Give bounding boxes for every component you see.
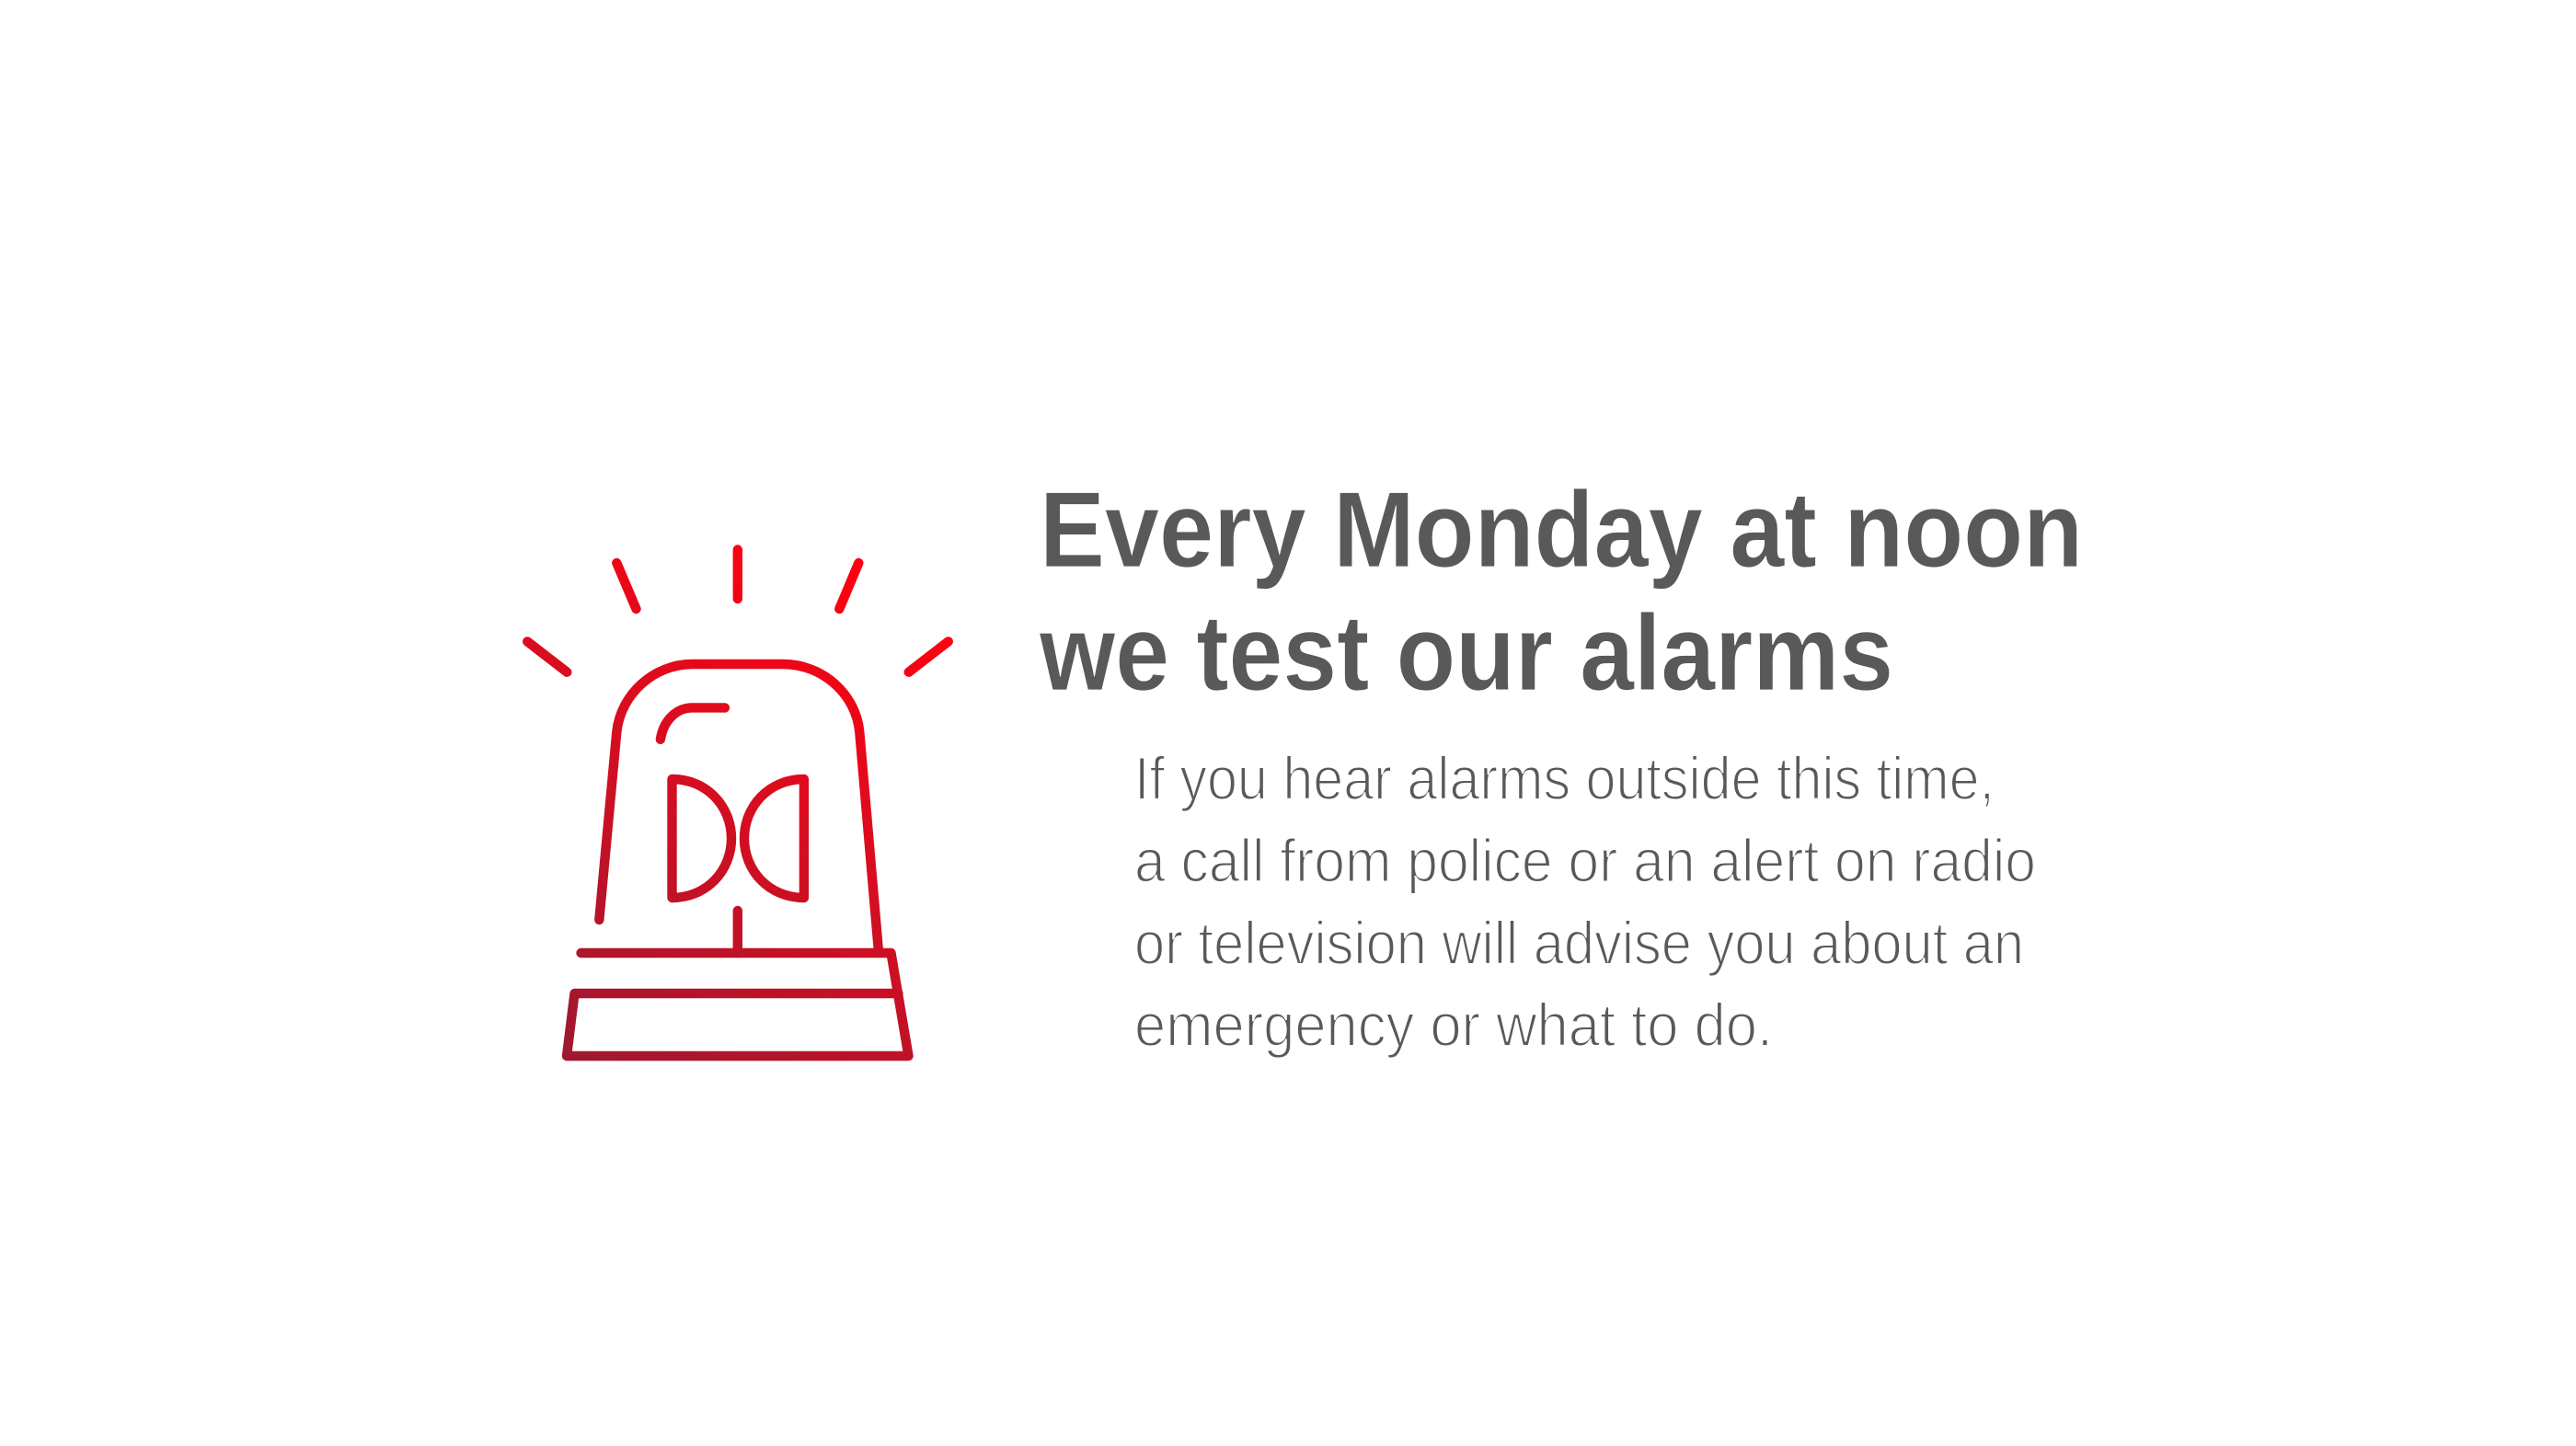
- body line 1: If you hear alarms outside this time,: [1134, 744, 1995, 812]
- icon: siren alarm light: [527, 550, 949, 1056]
- body line 2: a call from police or an alert on radio: [1134, 826, 2036, 894]
- icon: light rays: [527, 550, 949, 672]
- icon: siren dome: [599, 664, 879, 953]
- heading line 1: Every Monday at noon: [1040, 469, 2083, 590]
- icon: left lens: [672, 779, 731, 898]
- body line 3: or television will advise you about an: [1134, 909, 2024, 977]
- icon: lamp stem: [733, 911, 742, 953]
- icon: right lens: [744, 779, 804, 898]
- body text: [1134, 744, 2036, 1059]
- heading: [1039, 469, 2083, 713]
- icon: dome highlight: [661, 707, 725, 740]
- heading line 2: we test our alarms: [1039, 592, 1893, 713]
- body line 4: emergency or what to do.: [1134, 991, 1773, 1059]
- icon: siren base: [567, 953, 909, 1056]
